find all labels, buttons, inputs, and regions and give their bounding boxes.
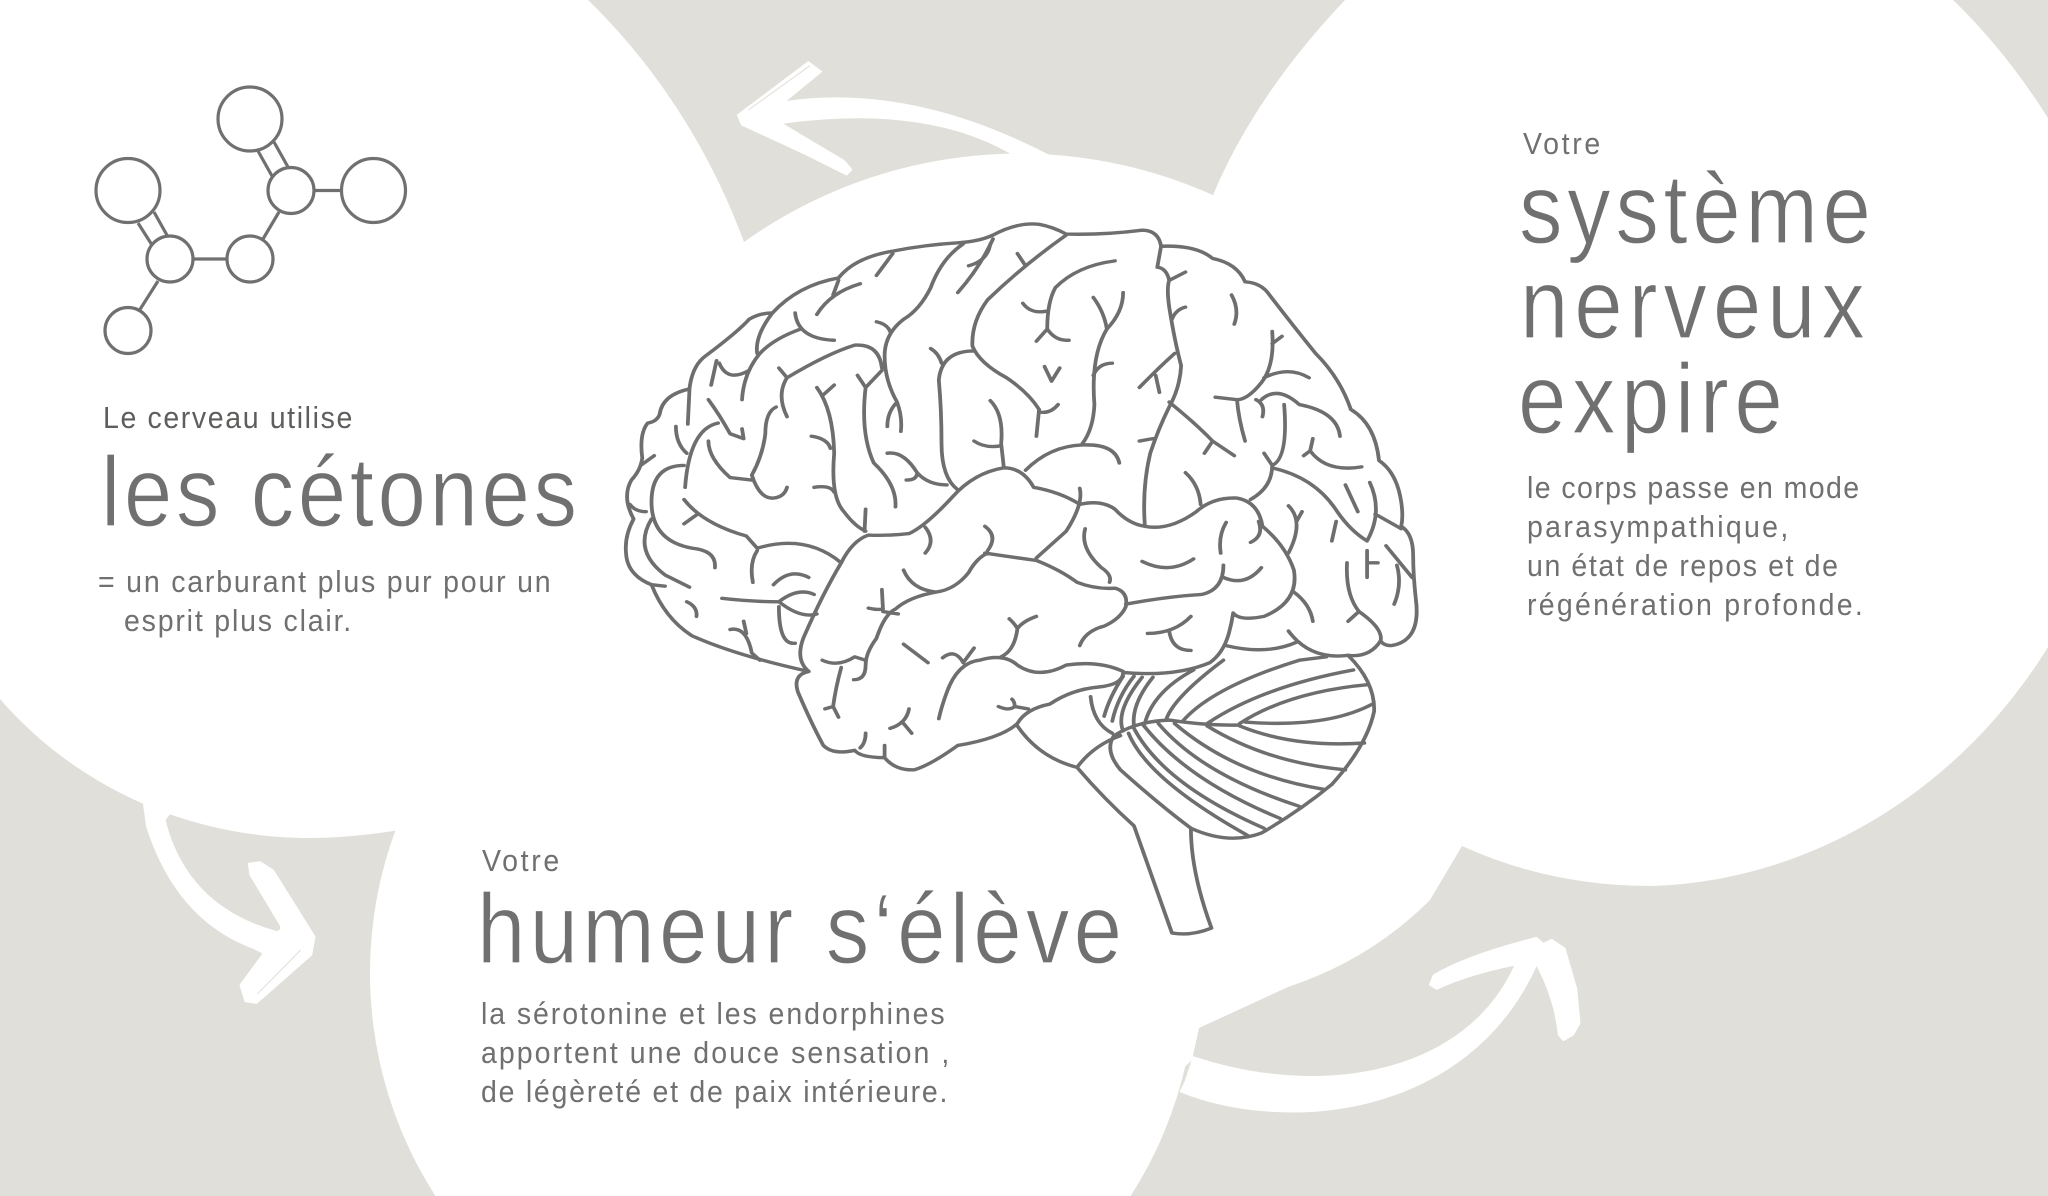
heading: système nerveux expire: expire xyxy=(1518,344,1783,454)
text block: nervous system: régénération profonde. xyxy=(1527,588,1863,622)
text block: nervous system: le corps passe en mode xyxy=(1527,471,1859,505)
heading: les cétones: les cétones xyxy=(101,437,577,547)
arrow: top brush arrow xyxy=(737,62,1048,175)
heading: système nerveux expire: système xyxy=(1519,154,1871,264)
panel: white bubble nervous system xyxy=(1213,0,2048,886)
panel: white central bubble xyxy=(500,154,1462,1100)
text block: ketones: Le cerveau utilise xyxy=(103,401,352,435)
text block: mood xyxy=(477,844,1122,1109)
heading: système nerveux expire: nerveux xyxy=(1520,249,1865,359)
text block: mood: de légèreté et de paix intérieure. xyxy=(481,1075,947,1109)
cerebellum xyxy=(1104,655,1374,838)
panel: white bubble ketones xyxy=(0,0,744,838)
heading: humeur s'élève: humeur s‘élève xyxy=(477,874,1122,984)
text block: mood: Votre xyxy=(482,844,559,878)
text block: mood: la sérotonine et les endorphines xyxy=(481,997,945,1031)
text block: mood: apportent une douce sensation , xyxy=(481,1036,949,1070)
icon: ketone molecule xyxy=(96,87,406,354)
occipital folds xyxy=(1215,295,1412,650)
heading: système nerveux expire xyxy=(1518,154,1871,454)
temporal lobe xyxy=(797,445,1295,770)
brainstem xyxy=(1017,697,1211,934)
brain outer contour xyxy=(626,224,1417,671)
parietal folds xyxy=(931,235,1234,525)
arrow: left brush arrow xyxy=(143,803,315,1003)
frontal folds xyxy=(630,244,963,660)
arrow: bottom-right brush arrow xyxy=(1180,937,1580,1112)
text block: nervous system xyxy=(1518,127,1871,622)
text block: nervous system: un état de repos et de xyxy=(1527,549,1838,583)
text block: ketones: esprit plus clair. xyxy=(124,604,351,638)
panel: white bubble mood xyxy=(370,560,1196,1196)
icon: brain xyxy=(626,224,1417,934)
text block: nervous system: Votre xyxy=(1523,127,1600,161)
text block: ketones: = un carburant plus pur pour un xyxy=(98,565,551,599)
text block: ketones xyxy=(98,401,577,638)
text block: nervous system: parasympathique, xyxy=(1527,510,1788,544)
